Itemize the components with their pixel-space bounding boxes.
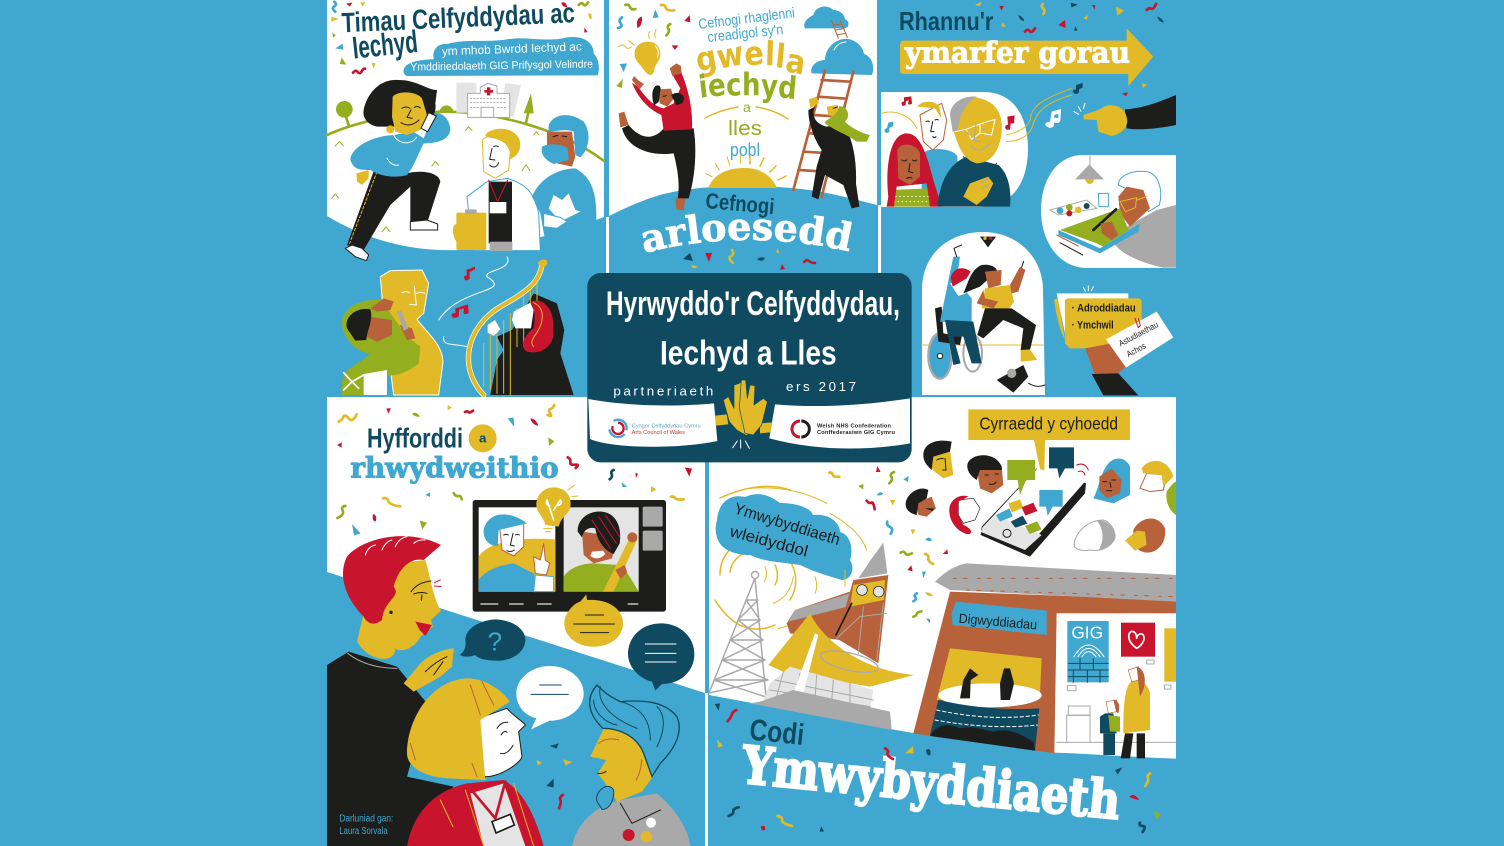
confetti	[616, 5, 690, 88]
illustration: events venue: GIG	[1071, 622, 1103, 642]
figure: man with blue quiff	[572, 685, 690, 846]
heading: creative programmes: a	[743, 99, 751, 115]
white panel areas	[327, 0, 1176, 846]
confetti	[683, 248, 815, 270]
heading: Cefnogi arloesedd	[642, 188, 852, 252]
heading: creative programmes: iechyd	[696, 67, 799, 107]
logo card: Welsh NHS Confederation	[769, 398, 910, 449]
figure: doctor with clipboard	[453, 129, 540, 251]
figure: woman with fringe	[407, 678, 544, 846]
heading: Timau Celfyddydau ac Iechyd	[341, 0, 575, 66]
cloud: political awareness: Ymwybyddiaeth	[732, 501, 842, 549]
speech bubbles: ?	[488, 627, 502, 657]
icon: smartphone and apps	[980, 447, 1088, 557]
heading: creative programmes: Cefnogi rhaglenni	[698, 5, 796, 33]
illustrator credit: Laura Sorvala	[339, 826, 388, 837]
illustrator credit: Darluniad gan:	[339, 814, 393, 825]
radio waves and mast	[709, 486, 796, 697]
illustration: diverse faces	[906, 441, 1176, 553]
icon: light bulb	[619, 29, 660, 75]
subtitle: partnership since 2017: ers 2017	[786, 379, 856, 394]
icons: music notes	[885, 83, 1083, 142]
heading: creative programmes: gwella	[692, 33, 809, 82]
figure: artist painting	[1050, 155, 1176, 268]
panel: supporting innovation	[616, 3, 874, 270]
hospital building	[456, 83, 521, 117]
icon: rising sun	[708, 156, 786, 188]
figure: woman on phone	[345, 80, 450, 261]
title: Hyrwyddo'r Celfyddydau, Iechyd a Lles	[606, 285, 900, 372]
icon: ladders	[793, 20, 853, 197]
confetti	[337, 405, 692, 535]
panel: arts and health teams	[327, 0, 604, 395]
confetti	[331, 2, 592, 73]
title: Hyrwyddo'r Celfyddydau, Iechyd a Lles: Iechyd a Lles	[660, 334, 837, 372]
icon: reports and case studies: · Ymchwil	[1072, 319, 1114, 331]
logo card: Welsh NHS Confederation: Conffederasiwn GIG Cymru	[817, 430, 896, 436]
arrow: ymarfer gorau: ymarfer gorau	[904, 35, 1130, 70]
cloud banner: every health board: ym mhob Bwrdd Iechyd ac	[442, 39, 582, 58]
cloud: political awareness	[716, 494, 852, 580]
sign: reaching the public: Cyrraedd y cyhoedd	[979, 413, 1118, 433]
heading: creative programmes: creadigol sy'n	[707, 22, 784, 46]
confetti	[761, 746, 1161, 832]
illustration: Senedd and Pierhead buildings	[750, 543, 914, 730]
panel background	[587, 273, 912, 462]
icon: clap rays	[733, 440, 749, 448]
heading: Timau Celfyddydau ac Iechyd: Iechyd	[351, 24, 419, 66]
icon: reports and case studies: · Adroddiadau	[1072, 303, 1136, 315]
illustration: ladder and clouds	[793, 6, 873, 208]
icon: pointing hand	[1074, 95, 1176, 136]
cloud: political awareness: wleidyddol	[727, 523, 810, 561]
sign: reaching the public	[968, 409, 1130, 487]
panel: raising awareness	[739, 409, 1176, 832]
figure: dancers and wheelchair	[922, 237, 1045, 393]
subtitle: partnership since 2017	[613, 379, 856, 399]
illustrator credit	[339, 814, 393, 837]
panel: training and networking	[327, 405, 739, 846]
illustration: idea and dancer	[616, 5, 740, 211]
heading: creative programmes	[692, 5, 809, 160]
subtitle: partnership since 2017: partneriaeth	[613, 384, 713, 399]
heading: Codi: Codi	[748, 713, 806, 752]
icon: reports and case studies: Achos	[1125, 340, 1148, 359]
heading: Cefnogi arloesedd: Cefnogi	[705, 188, 775, 219]
icon: video call tablet	[473, 485, 666, 612]
confetti	[536, 703, 739, 816]
logo card: Welsh NHS Confederation: Welsh NHS Confederation	[817, 423, 892, 429]
illustration: events venue: Digwyddiadau	[958, 611, 1038, 633]
heading: Hyfforddi a rhwydweithio	[350, 422, 559, 484]
icon: clouds	[804, 6, 873, 75]
figure: harpist	[439, 257, 574, 395]
heading: Hyfforddi a rhwydweithio: a	[479, 431, 487, 446]
figure: surgeon	[532, 115, 596, 242]
hill and trees	[327, 93, 604, 232]
illustration: events venue	[913, 563, 1176, 759]
confetti	[829, 466, 948, 624]
heading: Ymwybyddiaeth: Ymwybyddiaeth	[739, 735, 1123, 832]
heading: creative programmes: lles	[728, 118, 762, 140]
cloud banner: every health board: Ymddiriedolaeth GIG Prifysgol Velindre	[410, 58, 593, 74]
figure: hugging couple	[342, 270, 443, 395]
figure: red-haired woman	[327, 536, 454, 846]
heading: Hyfforddi a rhwydweithio: rhwydweithio	[350, 451, 559, 484]
logo card: Arts Council of Wales	[588, 399, 717, 447]
heading: Cefnogi arloesedd: arloesedd	[642, 214, 852, 252]
heading: Hyfforddi a rhwydweithio: Hyfforddi	[367, 422, 463, 453]
radio wave arcs	[750, 488, 867, 628]
panel: sharing best practice	[881, 2, 1176, 395]
heading: creative programmes: pobl	[730, 140, 760, 160]
heading: Rhannu'r: Rhannu'r	[899, 6, 993, 36]
central title panel	[587, 273, 912, 462]
figure: singing group	[881, 96, 1010, 207]
sun rays	[705, 155, 740, 177]
figure: dancing man	[619, 63, 695, 211]
cloud banner: every health board	[403, 37, 599, 76]
confetti	[975, 2, 1164, 96]
figure: man climbing	[808, 97, 870, 208]
logo card: Arts Council of Wales: Arts Council of Wales	[632, 430, 685, 436]
icon: reports and case studies	[1054, 286, 1173, 395]
speech bubbles	[460, 594, 694, 729]
icon: reports and case studies: Astudiaethau	[1117, 319, 1160, 348]
icon: high five hands	[715, 380, 772, 436]
title: Hyrwyddo'r Celfyddydau, Iechyd a Lles: Hyrwyddo'r Celfyddydau,	[606, 285, 900, 323]
arrow: ymarfer gorau	[900, 28, 1153, 86]
logo card: Arts Council of Wales: Cyngor Celfyddydau Cymru	[632, 423, 701, 429]
